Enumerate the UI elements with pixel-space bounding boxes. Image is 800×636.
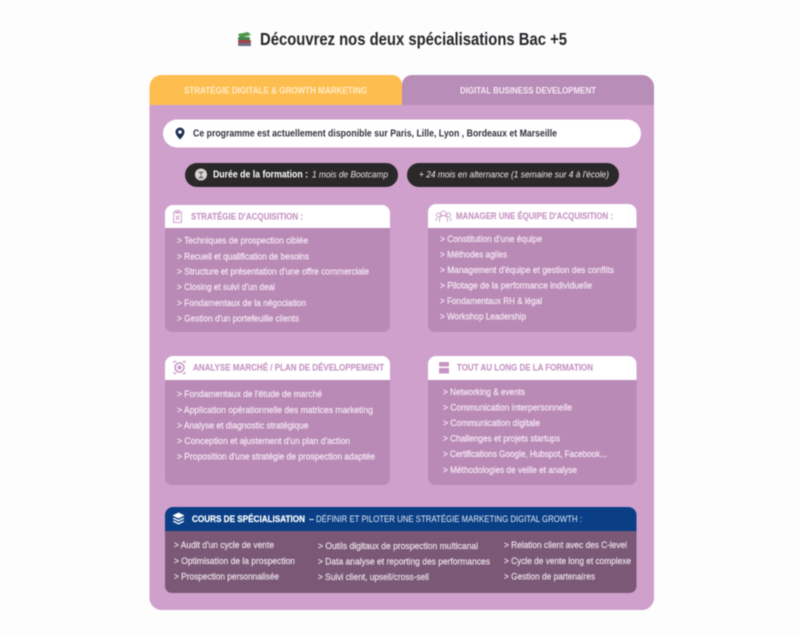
card: cours de spécialisation [165,507,636,593]
pill: durée de la formation: 1 mois de Bootcamp [312,170,388,180]
list: > Fondamentaux de la négociation [177,298,306,309]
tab: stratégie digitale [150,75,402,105]
title: Découvrez nos deux spécialisations Bac +5 [260,29,567,49]
list: > Management d'équipe et gestion des conflits [440,265,614,276]
list: > Constitution d'une équipe [440,234,542,245]
list: > Certifications Google, Hubspot, Facebook... [443,449,607,460]
list: column 1: > Optimisation de la prospection [174,556,295,567]
heading: ANALYSE MARCHÉ / PLAN DE DÉVELOPPEMENT [193,362,384,374]
list: column 2: > Outils digitaux de prospection multicanal [318,541,478,552]
panel: programme [150,75,654,610]
heading: STRATÉGIE D'ACQUISITION : [191,210,303,222]
list: > Pilotage de la performance individuelle [440,280,592,292]
list: column 3: > Gestion de partenaires [504,572,595,582]
card: tout au long de la formation [428,356,636,485]
card: manager une équipe [428,204,636,332]
icon: target eye [174,362,185,374]
location bar [163,120,641,148]
list: > Networking & events [443,387,525,398]
icon: calendar card [439,362,449,374]
list: > Proposition d'une stratégie de prospection adaptée [177,452,375,462]
list: > Communication interpersonnelle [443,402,572,414]
list: column 2 [318,541,490,583]
list: > Challenges et projets startups [443,434,560,444]
list [177,236,369,324]
list: > Conception et ajustement d'un plan d'action [177,436,350,447]
list [177,389,375,462]
icon: hourglass clock [195,168,207,180]
heading: – [309,514,314,524]
list: column 1: > Audit d'un cycle de vente [174,540,274,551]
heading [192,514,582,525]
heading: DÉFINIR ET PILOTER UNE STRATÉGIE MARKETING DIGITAL GROWTH : [316,514,582,525]
list: > Communication digitale [443,418,540,429]
list: > Fondamentaux de l'étude de marché [177,389,322,400]
location text: Ce programme est actuellement disponible sur Paris, Lille, Lyon , Bordeaux et Marseille [193,128,557,140]
list: > Gestion d'un portefeuille clients [177,314,299,324]
heading: TOUT AU LONG DE LA FORMATION [457,362,593,374]
list: > Techniques de prospection ciblée [177,236,308,247]
list: column 2: > Suivi client, upsell/cross-sell [318,572,429,583]
list: > Recueil et qualification de besoins [177,251,309,262]
list: column 3 [504,540,631,582]
list: column 3: > Cycle de vente long et complexe [504,556,631,567]
list: > Fondamentaux RH & légal [440,296,542,307]
tab: stratégie digitale: STRATÉGIE DIGITALE & GROWTH MARKETING [184,86,367,96]
icon: map pin [176,128,184,140]
list: > Closing et suivi d'un deal [177,282,275,293]
list: > Analyse et diagnostic stratégique [177,420,308,432]
pill: alternance [407,163,619,187]
list: column 1 [174,540,295,582]
icon: team [436,211,451,222]
pill: durée de la formation: Durée de la formation : [213,170,308,180]
pill: alternance: + 24 mois en alternance (1 semaine sur 4 à l'école) [419,170,609,180]
icon: layers [172,512,184,524]
tab: digital business development [402,75,654,105]
icon: stack of books [238,32,251,46]
list: column 3: > Relation client avec des C-level [504,540,627,551]
list: column 2: > Data analyse et reporting des performances [318,556,490,568]
card: stratégie d'acquisition [165,205,390,332]
list: > Méthodologies de veille et analyse [443,465,577,476]
list: > Méthodes agiles [440,250,507,260]
list: column 1: > Prospection personnalisée [174,572,279,582]
card: analyse marché [165,356,390,485]
pill: durée de la formation [185,163,398,187]
list [443,387,607,476]
heading: COURS DE SPÉCIALISATION [192,514,305,525]
list [440,234,614,322]
list: > Structure et présentation d'une offre commerciale [177,267,369,278]
heading: MANAGER UNE ÉQUIPE D'ACQUISITION : [456,210,613,222]
tab: digital business development: DIGITAL BUSINESS DEVELOPMENT [460,86,596,96]
list: > Application opérationnelle des matrices marketing [177,405,373,416]
list: > Workshop Leadership [440,312,526,322]
icon: clipboard [174,210,182,222]
